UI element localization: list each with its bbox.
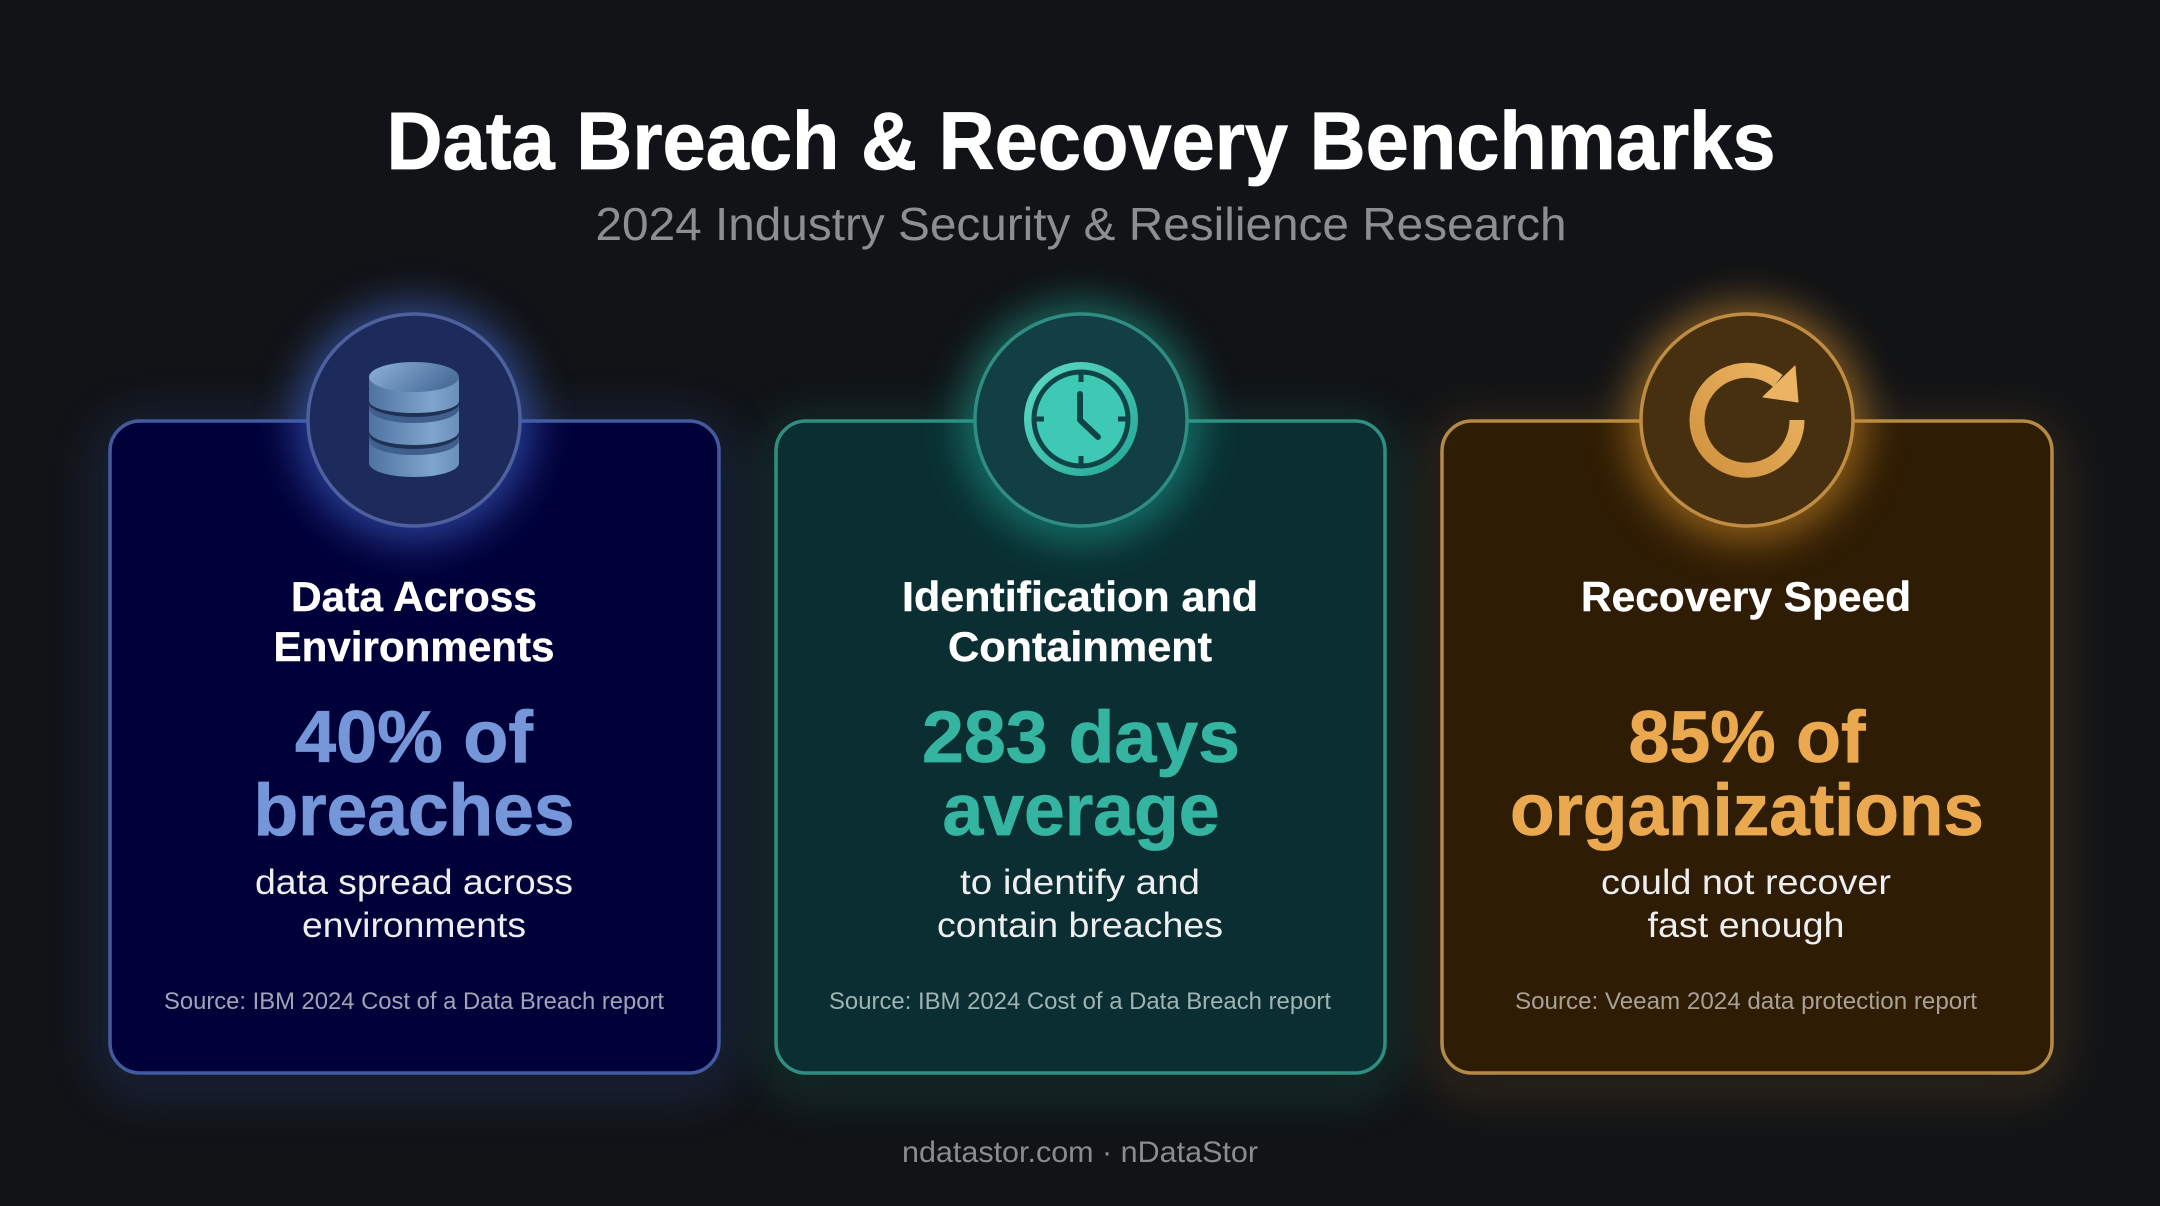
- icon badge: database: [294, 302, 534, 542]
- heading: Data Across: [291, 573, 537, 620]
- description: [1601, 863, 1891, 945]
- icon badge: clock: [961, 302, 1201, 542]
- heading: [902, 573, 1258, 670]
- subtitle: 2024 Industry Security & Resilience Research: [596, 198, 1566, 250]
- heading: [274, 573, 554, 670]
- big stat: [922, 697, 1240, 851]
- big stat: breaches: [254, 770, 574, 851]
- heading: Environments: [274, 623, 554, 670]
- icon: database: [369, 362, 459, 477]
- footer: ndatastor.com · nDataStor: [902, 1136, 1258, 1169]
- big stat: [254, 697, 574, 851]
- panel: data across environments: [110, 302, 719, 1083]
- source: Source: IBM 2024 Cost of a Data Breach report: [164, 988, 664, 1015]
- source: Source: IBM 2024 Cost of a Data Breach report: [829, 988, 1331, 1015]
- icon: clock: [1024, 362, 1138, 476]
- big stat: 283 days: [922, 697, 1240, 778]
- description: [937, 863, 1223, 945]
- heading: Containment: [948, 623, 1212, 670]
- icon badge: refresh: [1627, 302, 1867, 542]
- source: Source: Veeam 2024 data protection report: [1515, 988, 1977, 1015]
- big stat: 40% of: [295, 697, 534, 778]
- icon: refresh arrow: [1697, 366, 1798, 470]
- heading: Recovery Speed: [1581, 573, 1911, 620]
- description: environments: [302, 906, 526, 945]
- big stat: average: [942, 770, 1220, 851]
- description: contain breaches: [937, 906, 1223, 945]
- title: Data Breach & Recovery Benchmarks: [386, 96, 1776, 187]
- description: [255, 863, 573, 945]
- panel: identification and containment: [776, 302, 1385, 1083]
- description: could not recover: [1601, 863, 1891, 902]
- description: data spread across: [255, 863, 573, 902]
- big stat: 85% of: [1628, 697, 1866, 778]
- big stat: organizations: [1510, 770, 1984, 851]
- big stat: [1510, 697, 1984, 851]
- heading: Identification and: [902, 573, 1258, 620]
- description: to identify and: [960, 863, 1200, 902]
- panel: recovery speed: [1442, 302, 2052, 1083]
- description: fast enough: [1648, 906, 1844, 945]
